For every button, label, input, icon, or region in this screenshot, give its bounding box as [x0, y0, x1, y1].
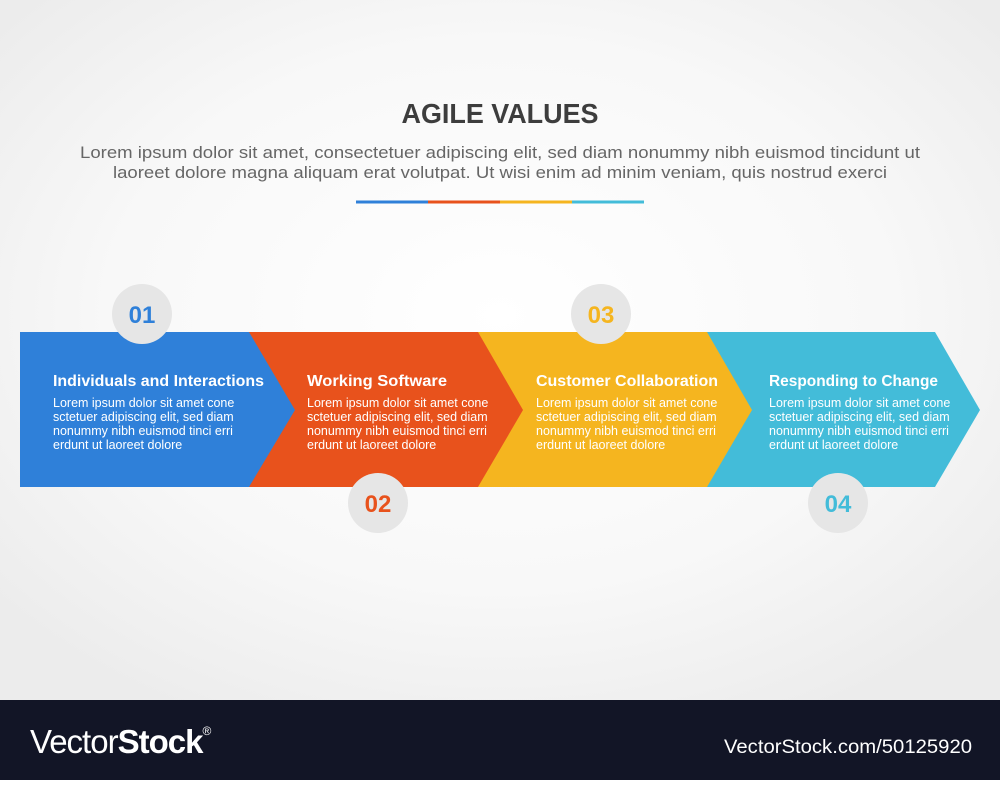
text 3 [536, 373, 718, 452]
text 4: Responding to Change [769, 373, 938, 390]
arrow band [20, 332, 980, 487]
text 3: Customer Collaboration [536, 373, 718, 390]
footer [0, 700, 1000, 780]
badge 04 [808, 473, 868, 533]
subtitle text [80, 143, 920, 182]
footer logo: VectorStock [30, 723, 202, 760]
text 1: erdunt ut laoreet dolore [53, 438, 182, 452]
text 2: sctetuer adipiscing elit, sed diam [307, 410, 488, 424]
subtitle text: Lorem ipsum dolor sit amet, consectetuer adipiscing elit, sed diam nonummy nibh euismod tincidunt ut [80, 143, 920, 162]
badge 03: 03 [588, 302, 614, 329]
footer logo: ® [202, 724, 211, 738]
segment 1 [20, 332, 295, 487]
number badges [112, 284, 868, 533]
text 2: Lorem ipsum dolor sit amet cone [307, 396, 488, 410]
step texts [53, 373, 950, 452]
badge 02: 02 [365, 491, 391, 518]
badge 01 [112, 284, 172, 344]
text 1: nonummy nibh euismod tinci erri [53, 424, 233, 438]
text 4: erdunt ut laoreet dolore [769, 438, 898, 452]
text 4: nonummy nibh euismod tinci erri [769, 424, 949, 438]
text 2: Working Software [307, 373, 447, 390]
text 2 [307, 373, 488, 452]
text 4: sctetuer adipiscing elit, sed diam [769, 410, 950, 424]
text 1 [53, 373, 264, 452]
badge 03 [571, 284, 631, 344]
subtitle text: laoreet dolore magna aliquam erat volutpat. Ut wisi enim ad minim veniam, quis nostrud exerci [113, 163, 887, 182]
badge 02 [348, 473, 408, 533]
color divider [356, 200, 644, 204]
title: AGILE VALUES [402, 98, 598, 129]
text 3: nonummy nibh euismod tinci erri [536, 424, 716, 438]
segment 4 [706, 332, 980, 487]
badge 01: 01 [129, 302, 155, 329]
text 3: erdunt ut laoreet dolore [536, 438, 665, 452]
segment 3 [478, 332, 752, 487]
text 3: sctetuer adipiscing elit, sed diam [536, 410, 717, 424]
badge 04: 04 [825, 491, 852, 518]
text 4: Lorem ipsum dolor sit amet cone [769, 396, 950, 410]
text 1: Individuals and Interactions [53, 373, 264, 390]
text 1: Lorem ipsum dolor sit amet cone [53, 396, 234, 410]
text 2: erdunt ut laoreet dolore [307, 438, 436, 452]
text 2: nonummy nibh euismod tinci erri [307, 424, 487, 438]
text 3: Lorem ipsum dolor sit amet cone [536, 396, 717, 410]
text 4 [769, 373, 950, 452]
text 1: sctetuer adipiscing elit, sed diam [53, 410, 234, 424]
segment 2 [249, 332, 523, 487]
footer url: VectorStock.com/50125920 [724, 737, 972, 758]
